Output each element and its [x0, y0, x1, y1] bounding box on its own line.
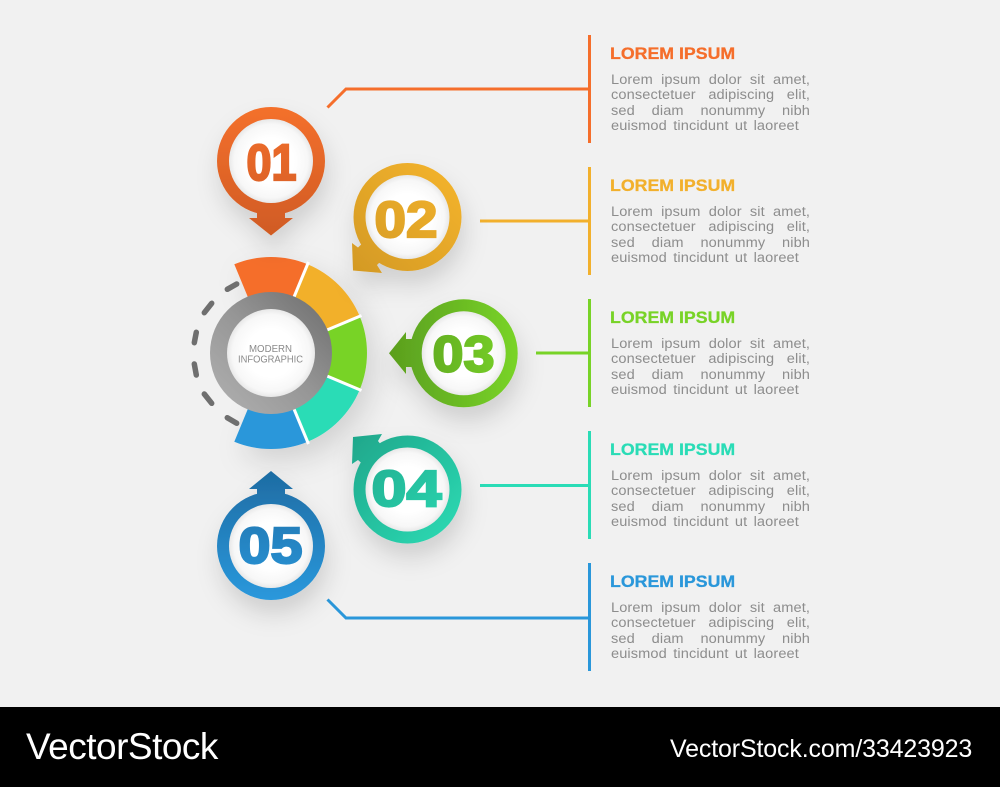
- footer bar: [0, 707, 1000, 787]
- badge centre: [422, 311, 506, 395]
- body 02: consectetuer adipiscing elit,: [611, 219, 810, 234]
- badge 04: [352, 434, 462, 544]
- number: 01: [246, 134, 296, 191]
- panel: text block 03: [588, 299, 814, 407]
- badge 02: [352, 163, 462, 273]
- heading 03: LOREM IPSUM: [610, 309, 735, 327]
- hub label: [238, 344, 303, 366]
- body 02: Lorem ipsum dolor sit amet,: [611, 204, 810, 218]
- segment: orange: [234, 257, 308, 353]
- body 02: euismod tincidunt ut laoreet: [611, 250, 799, 265]
- footer image id: VectorStock.com/33423923: [670, 735, 972, 763]
- body 03: [611, 336, 810, 397]
- body 03: Lorem ipsum dolor sit amet,: [611, 336, 810, 350]
- number: 05: [238, 517, 302, 574]
- connector: 04: [480, 484, 589, 487]
- badge shape: ring with left arrow: [389, 299, 518, 407]
- number: 03: [432, 326, 494, 382]
- segment separators: [294, 262, 362, 444]
- hub label: INFOGRAPHIC: [238, 354, 303, 366]
- panel: text block 02: [588, 167, 814, 275]
- segment: yellow: [245, 259, 365, 379]
- connector: 01: [328, 89, 589, 108]
- badge shape: ring with down arrow: [217, 107, 325, 236]
- footer brand: VectorStock: [26, 726, 218, 767]
- body 02: [611, 204, 810, 265]
- badge shape: ring with down-left arrow: [352, 163, 462, 273]
- body 01: euismod tincidunt ut laoreet: [611, 118, 799, 133]
- badge centre: [229, 119, 313, 203]
- body 03: sed diam nonummy nibh: [611, 367, 810, 382]
- donut segments: [234, 257, 367, 449]
- segment: green: [271, 316, 367, 390]
- dashed arc: [194, 284, 237, 423]
- segment: blue: [234, 353, 308, 449]
- connector: 02: [480, 220, 589, 222]
- body 01: Lorem ipsum dolor sit amet,: [611, 72, 810, 86]
- connector: 03: [536, 352, 589, 354]
- panel: text block 05: [588, 563, 814, 671]
- hub centre: [227, 309, 315, 397]
- segment: teal: [245, 327, 365, 447]
- badge 05: [217, 471, 325, 600]
- body 03: euismod tincidunt ut laoreet: [611, 382, 799, 397]
- heading 05: LOREM IPSUM: [610, 573, 735, 591]
- panel: text block 04: [588, 431, 814, 539]
- badge 01: [217, 107, 325, 236]
- body 02: sed diam nonummy nibh: [611, 235, 810, 250]
- body 05: [611, 600, 810, 661]
- badge 03: [389, 299, 518, 407]
- badge centre: [229, 504, 313, 588]
- body 04: Lorem ipsum dolor sit amet,: [611, 468, 810, 482]
- badge centre: [366, 175, 450, 259]
- body 05: Lorem ipsum dolor sit amet,: [611, 600, 810, 614]
- hub label: MODERN: [249, 344, 292, 355]
- grey hub ring: [210, 292, 332, 414]
- body 04: sed diam nonummy nibh: [611, 499, 810, 514]
- body 01: sed diam nonummy nibh: [611, 103, 810, 118]
- body 05: euismod tincidunt ut laoreet: [611, 646, 799, 661]
- number: 02: [374, 191, 438, 248]
- heading 04: LOREM IPSUM: [610, 441, 735, 459]
- body 05: consectetuer adipiscing elit,: [611, 615, 810, 630]
- badge centre: [366, 448, 450, 532]
- body 01: [611, 72, 810, 133]
- body 04: consectetuer adipiscing elit,: [611, 483, 810, 498]
- heading 02: LOREM IPSUM: [610, 177, 735, 195]
- body 01: consectetuer adipiscing elit,: [611, 87, 810, 102]
- connector: 05: [328, 600, 589, 618]
- body 04: [611, 468, 810, 529]
- number: 04: [372, 460, 442, 517]
- body 04: euismod tincidunt ut laoreet: [611, 514, 799, 529]
- panel: text block 01: [588, 35, 814, 143]
- body 05: sed diam nonummy nibh: [611, 631, 810, 646]
- donut chart: [194, 257, 367, 449]
- body 03: consectetuer adipiscing elit,: [611, 351, 810, 366]
- badge shape: ring with up-left arrow: [352, 434, 462, 544]
- heading 01: LOREM IPSUM: [610, 45, 735, 63]
- badge shape: ring with up arrow: [217, 471, 325, 600]
